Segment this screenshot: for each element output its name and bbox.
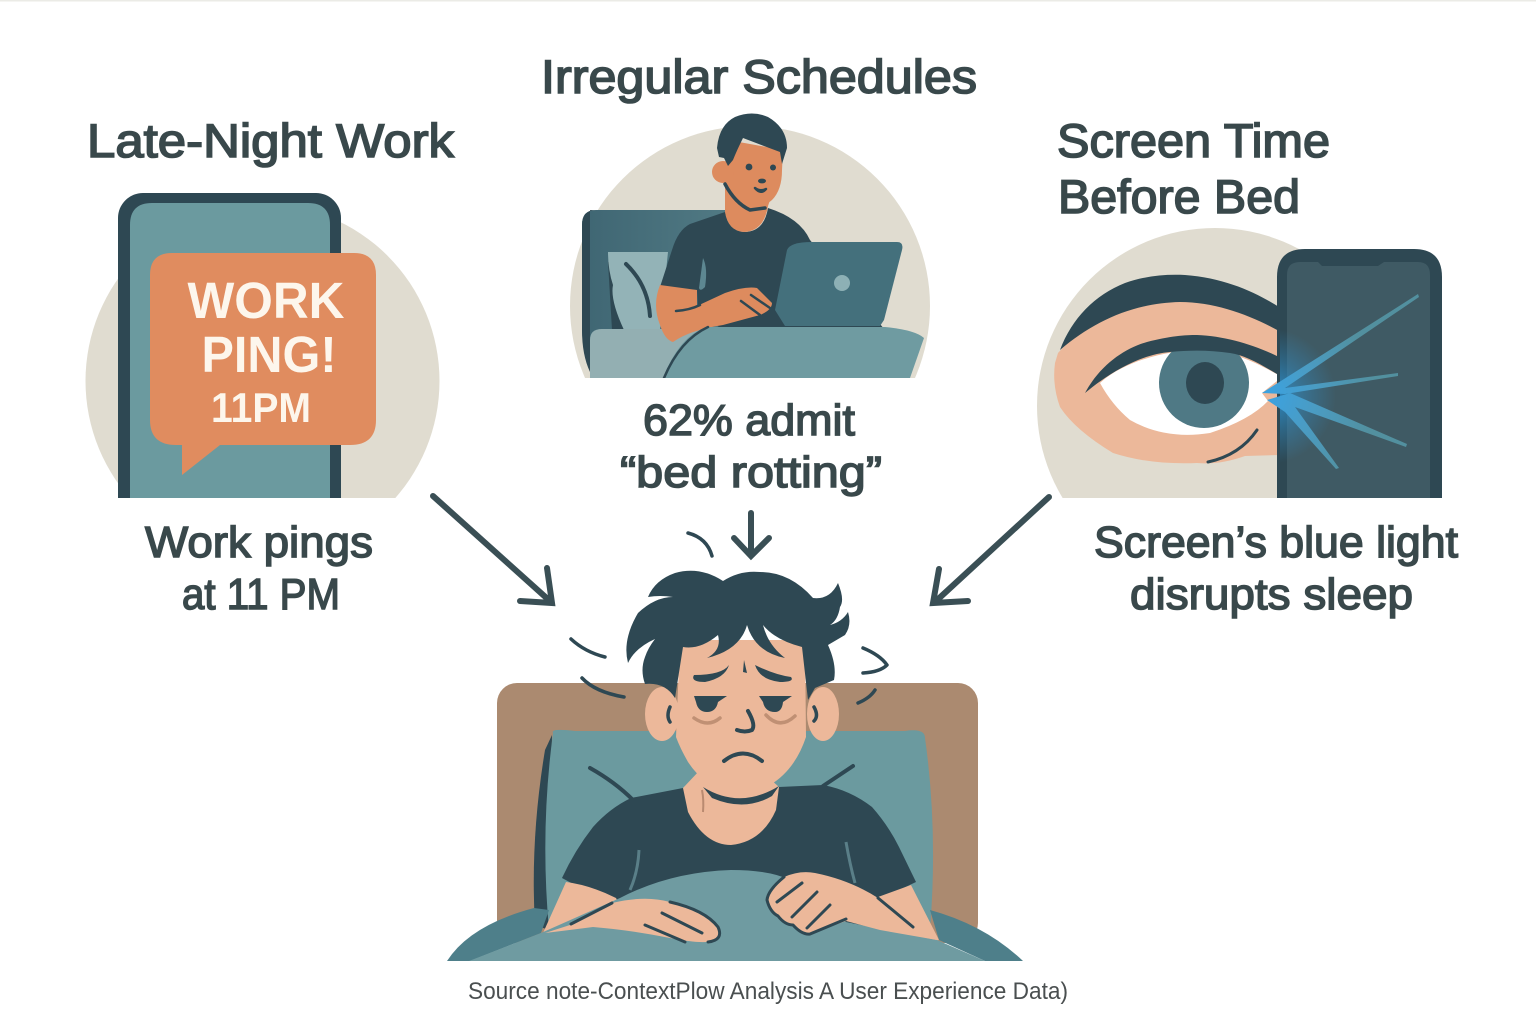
arrow: top to center [734,513,769,556]
caption: 62% admit bed rotting: “bed rotting” [620,448,882,497]
pillow [534,730,933,930]
side blanket [447,908,549,961]
ears [645,687,679,741]
source note: Source note-ContextPlow Analysis A User Experience Data) [468,978,1068,1005]
arrow: right to center [933,497,1049,603]
speech bubble: work ping: 11PM [211,384,311,431]
illustration: tired person in bed [447,533,1023,961]
heading: Late-Night Work: Late-Night Work [87,114,455,167]
neck [683,770,779,845]
light bed sheet [590,329,700,378]
caption: 62% admit bed rotting [620,396,882,497]
blue light rays [1262,294,1419,469]
caption: blue light disrupts sleep: Screen’s blue light [1094,518,1458,567]
pillow [608,252,668,330]
illustration: phone with work ping [86,193,440,498]
face [676,640,806,795]
person [656,114,885,342]
speech bubble: work ping: PING! [202,326,336,383]
eye white [1100,350,1282,435]
blanket [469,870,985,961]
illustration: person with laptop in bed [570,114,930,378]
hair [626,571,849,700]
illustration: eye and phone blue light [1037,228,1442,498]
headboard [497,683,978,943]
arrow: left to center [433,496,552,603]
headboard [582,210,740,340]
nose and mouth [737,711,753,732]
iris [1159,350,1249,428]
eyebrow [1060,275,1279,350]
arm [656,285,772,342]
neck [725,180,775,232]
head [725,140,783,208]
laptop [775,242,902,326]
heading: Irregular Schedules: Irregular Schedules [541,50,977,103]
eye skin [1054,300,1280,463]
arms [535,882,640,945]
hand right [767,872,937,940]
heading: Screen Time Before Bed: Screen Time [1057,114,1330,167]
speech bubble: work ping [150,253,376,475]
torso [660,208,885,330]
caption: work pings: at 11 PM [182,570,340,619]
heading: Screen Time Before Bed [1057,114,1330,223]
phone [1277,249,1442,498]
hair [717,114,787,166]
caption: work pings [145,518,373,619]
shirt [562,785,916,930]
heading: Screen Time Before Bed: Before Bed [1058,170,1300,223]
caption: blue light disrupts sleep: disrupts sleep [1130,570,1413,619]
speech bubble: work ping: WORK [188,272,345,329]
caption: work pings: Work pings [145,518,373,567]
eye bags [694,715,795,723]
caption: 62% admit bed rotting: 62% admit [643,396,855,445]
worry marks [571,533,887,703]
brows [693,665,792,682]
hand left [545,899,720,942]
eyelid [1085,335,1282,393]
head [626,571,849,805]
caption: blue light disrupts sleep [1094,518,1458,619]
eyes [694,696,727,712]
collar [703,786,779,805]
bed blanket [663,327,924,378]
sleeve folds [630,842,855,890]
